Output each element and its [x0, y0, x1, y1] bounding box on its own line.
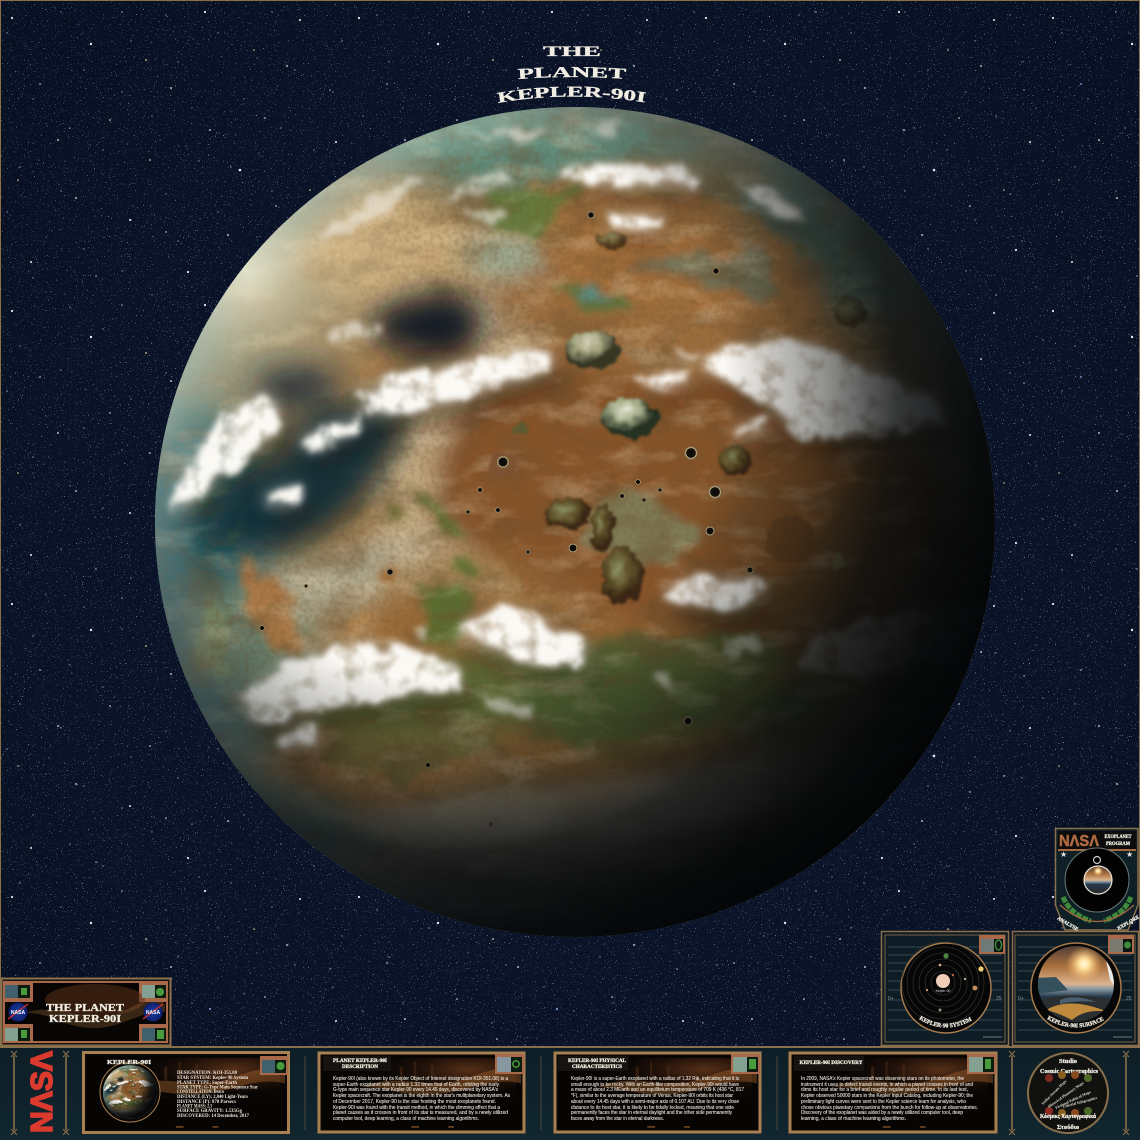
panel: name plate — [2, 978, 170, 1046]
icon tab — [979, 935, 1005, 954]
discovery text: Discovery of the exoplanet was aided by a newly utilized computer tool, deep — [801, 1110, 963, 1116]
heading: DESCRIPTION — [342, 1065, 378, 1070]
icon tab — [260, 1056, 288, 1075]
panel: description — [319, 1053, 524, 1132]
emblem dots — [1045, 1071, 1092, 1117]
description text: G-type main sequence star Kepler-90 every 14.45 days, discovered by NASA's — [333, 1087, 498, 1093]
icon tabs — [5, 985, 166, 1041]
badge motto: EXPLORE — [1117, 915, 1140, 932]
NASA insignia right: NASA — [146, 1010, 160, 1016]
system caption: KEPLER-90 SYSTEM — [918, 1016, 972, 1028]
physical text: about every 14.45 days with a semi-major axis of 0.107 AU. Due to its very close — [571, 1099, 739, 1105]
orbits — [902, 942, 984, 1024]
title: PLANET — [518, 66, 626, 80]
thumbnail planet — [100, 1062, 160, 1122]
discovery text: learning, a class of machine learning algorithms. — [801, 1116, 906, 1122]
description text: Kepler-90I was found with the transit method, in which the dimming effect that a — [333, 1105, 500, 1111]
emblem heading: Cosmic Cartographics — [1040, 1068, 1098, 1075]
spec list: DISCOVERED: 14 December, 2017 — [177, 1113, 249, 1119]
description text: Kepler spacecraft. The exoplanet is the eighth in the star's multiplanetary system. As — [333, 1093, 510, 1099]
badge black disc — [1065, 848, 1129, 912]
icon tab — [731, 1054, 760, 1074]
badge planet globe — [1084, 856, 1112, 894]
badge laurel — [1063, 897, 1131, 921]
description text: planet causes as it crosses in front of its star is measured, and by a newly utilized — [333, 1110, 508, 1116]
physical text: a mass of about 2.3 MEarth and an equilibrium temperature of 709 K (436 °C, 817 — [571, 1087, 744, 1093]
scale labels: 0+ — [888, 996, 894, 1002]
heading — [323, 1056, 391, 1071]
NASA insignia left — [8, 1002, 28, 1022]
badge program label: EXOPLANET — [1104, 835, 1132, 840]
discovery text: dims its host star for a brief and roughly regular period of time. In its last test, — [801, 1087, 968, 1093]
spec list: DESIGNATION: KOI-351.08 — [177, 1070, 237, 1076]
icon tab — [967, 1054, 996, 1074]
emblem list: Fictional Political Maps — [1055, 1090, 1092, 1110]
badge motto — [1056, 915, 1140, 933]
description text: Kepler-90I (also known by its Kepler Object of Interest designation KOI-351.08) is a — [333, 1076, 508, 1082]
heading: PLANET KEPLER-90I — [333, 1059, 387, 1064]
description text: super-Earth exoplanet with a radius 1.32 times that of Earth, orbiting the early — [333, 1082, 499, 1088]
emblem footer: Στούδιο — [1057, 1123, 1079, 1131]
bottom info strip — [0, 1046, 1140, 1140]
spec list: PLANET MASS: 2.3 — [177, 1104, 212, 1110]
heading — [794, 1056, 864, 1071]
panel: Kepler-90 system — [880, 930, 1010, 1046]
plate title — [46, 1003, 124, 1025]
description text: of December 2017, Kepler-90 is the star hosting the most exoplanets found. — [333, 1099, 496, 1105]
physical text: distance to its host star, it is likely to be tidally locked, meaning that one side — [571, 1105, 734, 1111]
scale labels: 25 — [1126, 996, 1132, 1002]
emblem list: Stellar Stream Maps — [1041, 1079, 1068, 1106]
badge motto: ANALYSE — [1056, 917, 1079, 933]
discovery text: chose obvious planetary companions from the bunch for follow-up at observatories. — [801, 1105, 978, 1111]
spec list: DISTANCE (P): 870 Parsecs — [177, 1098, 236, 1105]
studio emblem — [1028, 1053, 1108, 1133]
spec list: STAR SYSTEM: Kepler-90 System — [177, 1075, 249, 1081]
NASA insignia left: NASA — [11, 1010, 25, 1016]
icon tab — [1108, 935, 1134, 954]
surface caption: KEPLER-90I SURFACE — [1046, 1015, 1104, 1028]
scale labels — [1018, 996, 1132, 1002]
physical text — [571, 1076, 744, 1122]
NASA insignia right — [143, 1002, 163, 1022]
scale labels: 0+ — [1018, 996, 1024, 1002]
emblem list: Historical Planetary Maps — [1047, 1081, 1085, 1109]
emblem list — [1041, 1079, 1098, 1110]
badge program label — [1104, 835, 1132, 847]
spec list: DISTANCE (LY): 2,840 Light-Years — [177, 1093, 248, 1100]
badge stars: ★ — [1126, 850, 1133, 859]
planet Kepler-90I — [120, 100, 1000, 945]
title: THE — [543, 44, 601, 60]
spec list: SURFACE GRAVITY: 1.535Gg — [177, 1108, 242, 1114]
panel: physical characteristics — [555, 1053, 760, 1132]
badge program label: PROGRAM — [1106, 842, 1130, 847]
plate title: THE PLANET — [46, 1003, 124, 1014]
thumbnail heading: KEPLER-90I — [107, 1059, 152, 1066]
heading: CHARACTERISTICS — [572, 1065, 622, 1070]
title: KEPLER-90I — [496, 86, 646, 103]
spec list — [177, 1070, 259, 1119]
ornamental columns — [11, 1051, 1129, 1135]
physical text: permanently faces the star in eternal daylight and the other side permanently — [571, 1110, 732, 1116]
emblem footer — [1040, 1112, 1097, 1131]
discovery text: instrument it uses to detect transit events, in which a planet crosses in front of and — [801, 1082, 973, 1088]
discovery text — [801, 1076, 978, 1122]
heading — [558, 1056, 628, 1071]
heading: KEPLER-90I PHYSICAL — [568, 1059, 627, 1064]
discovery text: In 2009, NASA's Kepler spacecraft was observing stars on its photometer, the — [801, 1076, 964, 1082]
scale labels — [888, 996, 1002, 1002]
emblem heading — [1040, 1058, 1098, 1075]
physical text: small enough to be rocky. With an Earth-like composition, Kepler-90I would have — [571, 1082, 739, 1088]
surface scene — [1036, 944, 1116, 1024]
badge NASA wordmark: NΛSΛ — [1059, 833, 1099, 850]
badge stars — [1060, 850, 1133, 859]
star label: Kepler-90 — [936, 989, 950, 993]
physical text: Kepler-90I is a super-Earth exoplanet with a radius of 1.32 R⊕, indicating that it is — [571, 1076, 739, 1082]
spec list: STAR TYPE: G-Type Main Sequence Star — [177, 1084, 259, 1090]
mission badge — [1056, 828, 1140, 933]
discovery text: preliminary light curves were sent to the Kepler science team for analysis, who — [801, 1099, 966, 1105]
icon tab — [495, 1054, 524, 1074]
scale labels: 25 — [996, 996, 1002, 1002]
emblem heading: Studio — [1059, 1058, 1077, 1065]
description text: computer tool, deep learning, a class of machine learning algorithms. — [333, 1116, 479, 1122]
panel: Kepler-90I surface — [1012, 930, 1139, 1046]
panel: planet data — [84, 1052, 288, 1132]
panel: discovery — [790, 1053, 996, 1132]
spec list: PLANET TYPE: Super-Earth — [177, 1080, 237, 1086]
NASA worm logo: NΛSΛ — [24, 1051, 59, 1133]
spec list: CONSTELLATION: Draco — [177, 1089, 224, 1095]
physical text: °F), similar to the average temperature of Venus. Kepler-90I orbits its host star — [571, 1093, 733, 1099]
badge stars: ★ — [1060, 850, 1067, 859]
plate title: KEPLER-90I — [49, 1014, 121, 1025]
description text — [333, 1076, 510, 1122]
star and planets — [926, 953, 984, 1012]
emblem footer: Κόσμικς Χαρτογραφικά — [1040, 1112, 1097, 1120]
heading: KEPLER-90I DISCOVERY — [800, 1061, 863, 1066]
discovery text: Kepler observed 50000 stars in the Kepler Input Catalog, including Kepler-90; the — [801, 1093, 973, 1099]
title — [496, 44, 646, 103]
physical text: faces away from the star in eternal darkness. — [571, 1116, 664, 1122]
emblem list: Celestial Infographics — [1062, 1096, 1098, 1109]
